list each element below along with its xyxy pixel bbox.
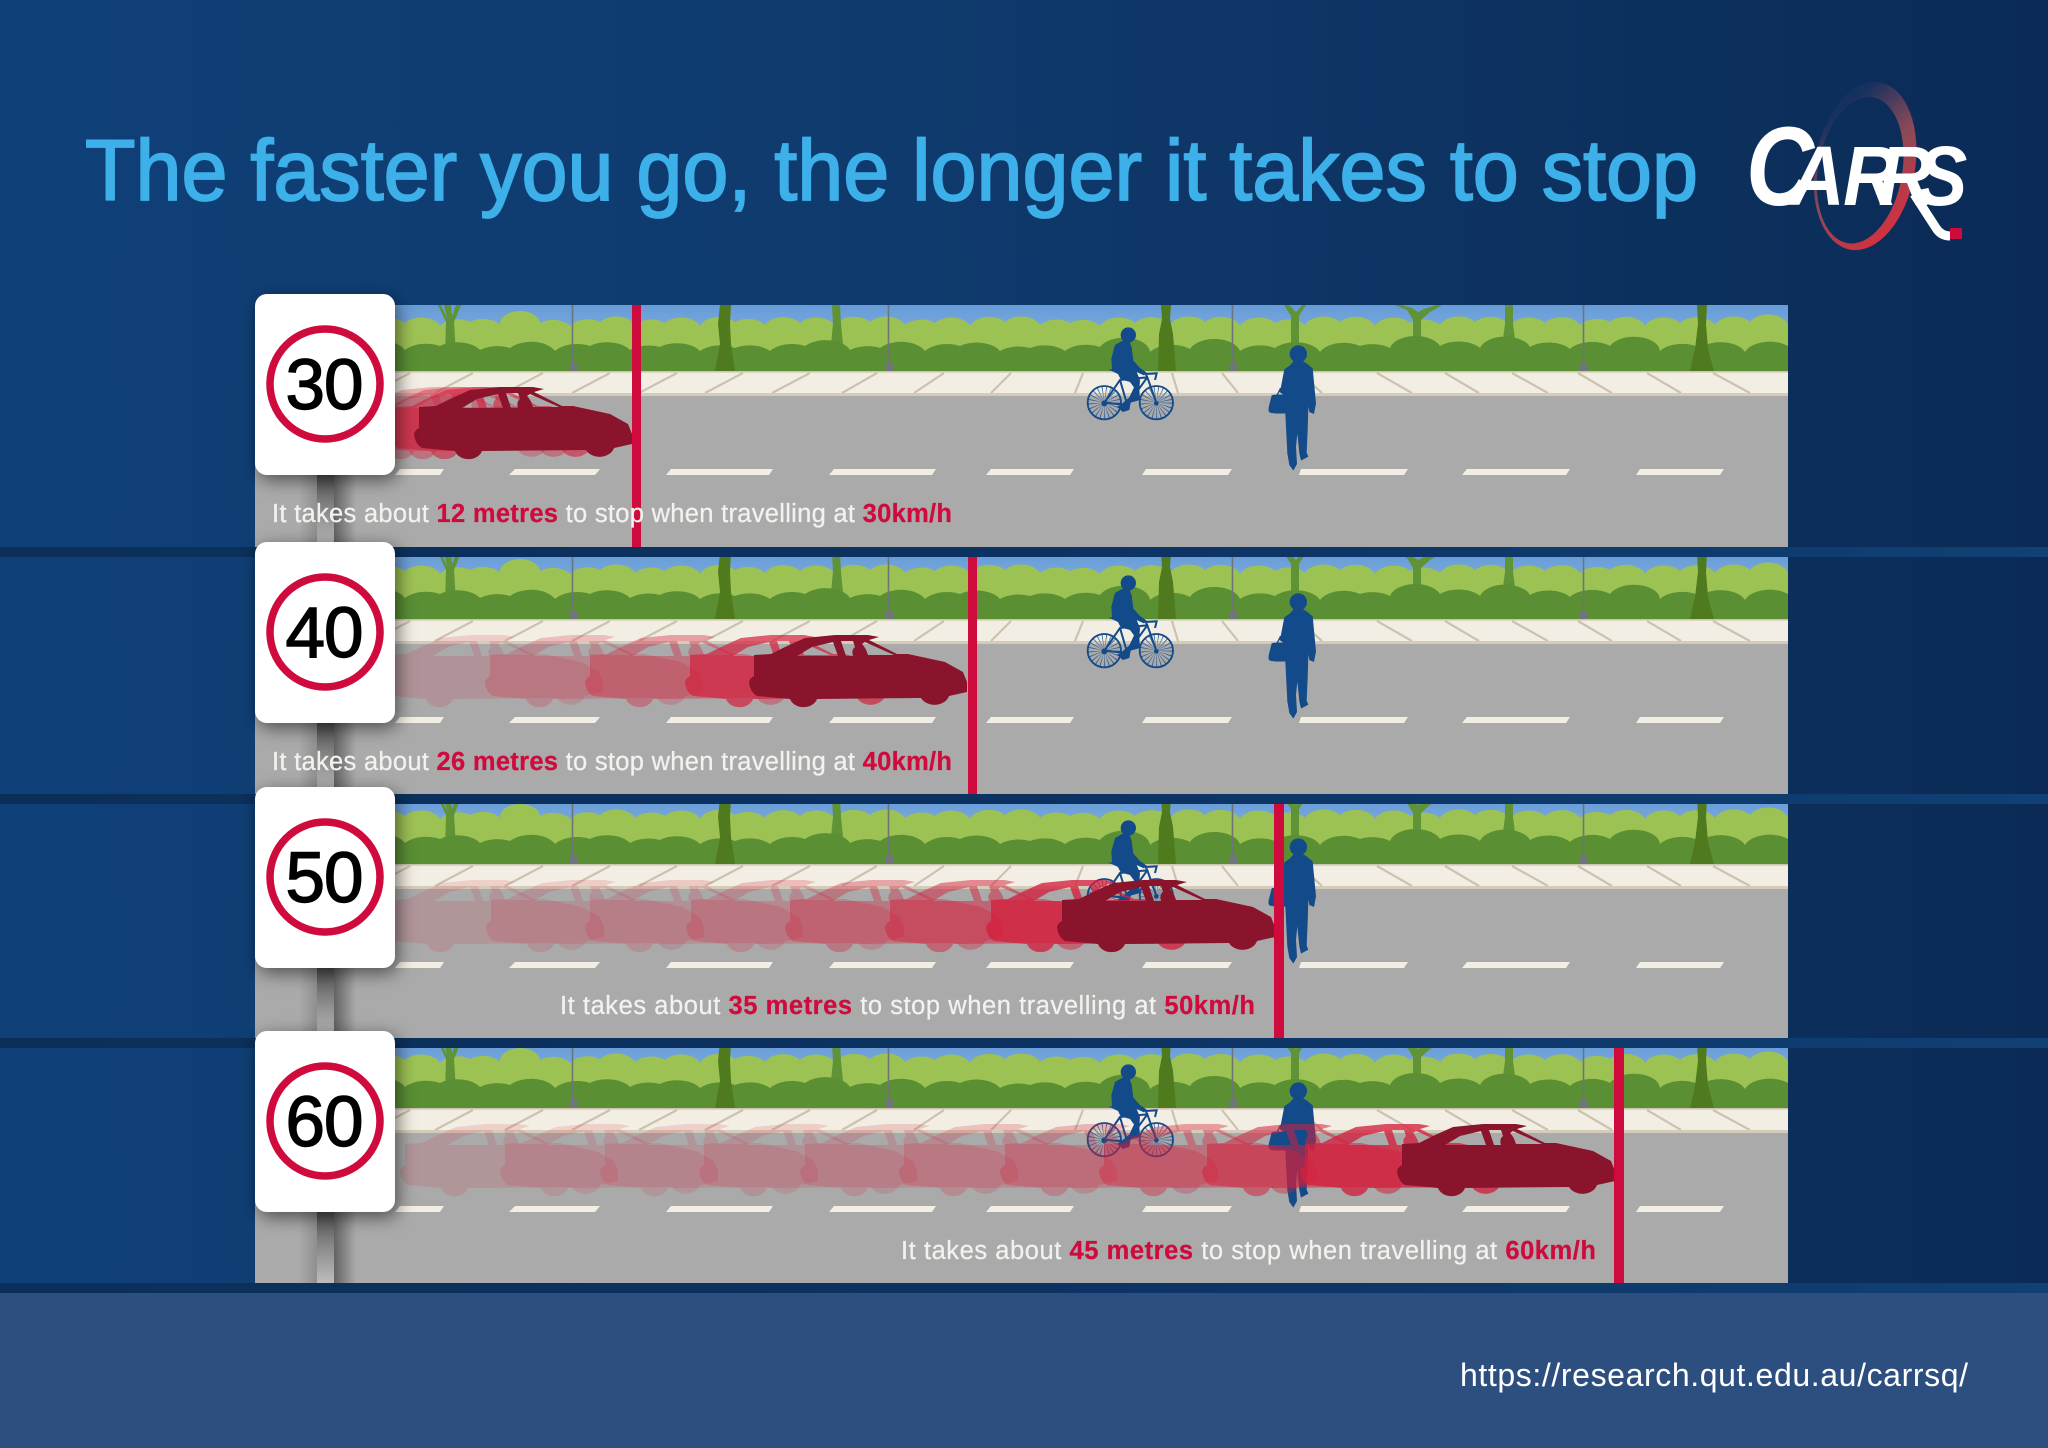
- stopping distance caption: It takes about 35 metres to stop when travelling at 50km/h: [560, 992, 1255, 1020]
- speed sign 50: 50: [286, 839, 362, 918]
- footer band: [0, 1293, 2048, 1448]
- stopping line: [1274, 804, 1284, 1038]
- speed sign 50: [255, 787, 395, 968]
- ghost cars: braking blur: [386, 880, 1204, 952]
- car stopped: [1057, 880, 1275, 952]
- speed sign 60: [255, 1031, 395, 1212]
- panel: 60 km/h road scene: [255, 1048, 1788, 1283]
- car stopped: [414, 387, 632, 459]
- stopping line: [632, 305, 641, 547]
- ghost cars: braking blur: [400, 1124, 1518, 1196]
- stopping line: [1614, 1048, 1624, 1283]
- sign post: [304, 1212, 354, 1283]
- panel: 30 km/h road scene: [255, 294, 1788, 556]
- sign post: [304, 475, 354, 542]
- speed sign 30: [255, 294, 395, 475]
- stopping distance caption: It takes about 26 metres to stop when travelling at 40km/h: [272, 748, 952, 776]
- road scenery with cyclist and pedestrian: [255, 1048, 1788, 1283]
- footer url: https://research.qut.edu.au/carrsq/: [1460, 1357, 1968, 1393]
- speed sign 40: 40: [286, 594, 362, 673]
- panel: 40 km/h road scene: [255, 542, 1788, 804]
- logo: CARRS-Q: [1746, 74, 1967, 258]
- speed sign 60: 60: [286, 1083, 362, 1162]
- car stopped: [749, 635, 967, 707]
- ghost cars: braking blur: [385, 635, 903, 707]
- sign post: [304, 968, 354, 1031]
- logo: CARRS-Q: ARRS: [1788, 129, 1967, 223]
- road scenery with cyclist and pedestrian: [255, 294, 1788, 556]
- speed sign 30: 30: [286, 346, 362, 425]
- stopping distance caption: It takes about 45 metres to stop when travelling at 60km/h: [901, 1237, 1596, 1265]
- panel: 50 km/h road scene: [255, 804, 1788, 1038]
- stopping line: [968, 557, 977, 794]
- car stopped: [1397, 1124, 1615, 1196]
- speed sign 40: [255, 542, 395, 723]
- ghost cars: braking blur: [395, 387, 588, 460]
- stopping distance caption: It takes about 12 metres to stop when travelling at 30km/h: [272, 500, 952, 528]
- logo: CARRS-Q: C: [1746, 104, 1816, 229]
- sign post: [304, 723, 354, 787]
- road scenery with cyclist and pedestrian: [255, 542, 1788, 804]
- road scenery with cyclist and pedestrian: [255, 804, 1788, 1038]
- title: The faster you go, the longer it takes to stop: [85, 123, 1698, 219]
- divider strips: [0, 547, 2048, 1293]
